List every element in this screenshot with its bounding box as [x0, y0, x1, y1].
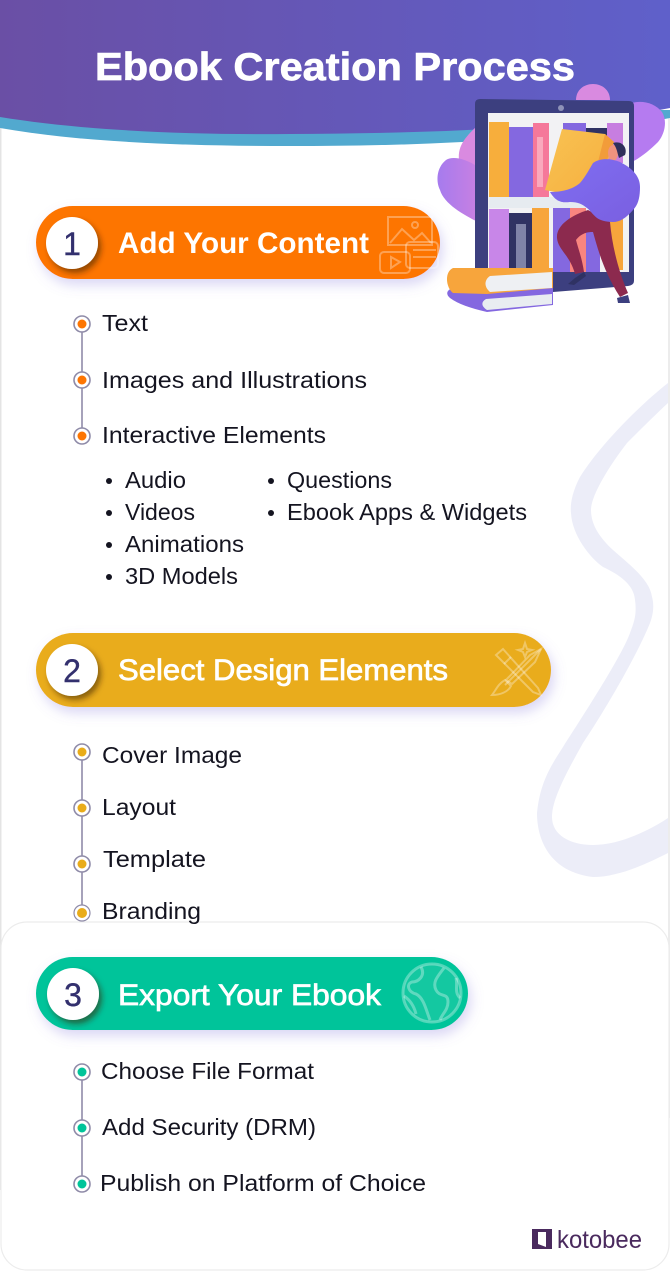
- heading: export your ebook: Export Your Ebook: [118, 979, 382, 1012]
- shelf books: [489, 122, 623, 272]
- sub-list: interactive elements, column 2: Ebook Apps & Widgets: [287, 499, 527, 525]
- icon: media: [380, 217, 438, 273]
- logo: kotobee: kotobee: [557, 1226, 642, 1254]
- number badge 1: 1: [63, 226, 81, 262]
- section 2 banner: [36, 633, 551, 707]
- person: [550, 142, 640, 303]
- heading: select design elements: Select Design Elements: [118, 654, 448, 687]
- tablet: [475, 99, 634, 292]
- item: interactive elements: Interactive Elements: [102, 422, 326, 448]
- item: add security: Add Security (DRM): [102, 1114, 316, 1140]
- icon: pencil and brush: [492, 643, 541, 695]
- item: text: Text: [102, 310, 149, 336]
- number badge 1: [46, 217, 98, 269]
- sub-list: interactive elements, column 1: 3D Models: [125, 563, 238, 589]
- heading: add your content: Add Your Content: [118, 227, 369, 260]
- item: branding: Branding: [102, 898, 201, 924]
- number badge 2: [46, 644, 98, 696]
- item: template: Template: [103, 846, 206, 872]
- sub-list: interactive elements, column 1: Videos: [125, 499, 195, 525]
- background swirl: [537, 383, 668, 877]
- section 1 banner: [36, 206, 440, 279]
- sub-list: interactive elements, column 2: Questions: [287, 467, 392, 493]
- list: section 3 items: [74, 1058, 426, 1196]
- icon: globe: [403, 964, 461, 1022]
- sub-list: interactive elements, column 1: Audio: [125, 467, 186, 493]
- item: cover image: Cover Image: [102, 742, 242, 768]
- sub-list: interactive elements, column 1: Animations: [125, 531, 244, 557]
- item: layout: Layout: [102, 794, 177, 820]
- list: section 2 items: [74, 742, 242, 924]
- item: layout: [74, 794, 177, 820]
- number badge 2: 2: [63, 653, 81, 689]
- plants behind tablet: [438, 84, 665, 222]
- panel: section 3 card: [1, 922, 669, 1270]
- item: choose file format: Choose File Format: [101, 1058, 315, 1084]
- number badge 3: [47, 968, 99, 1020]
- item: text: [74, 310, 149, 336]
- held book: [545, 129, 614, 200]
- sub-list: interactive elements, column 2: [268, 467, 527, 525]
- header banner: [0, 0, 670, 146]
- title: Ebook Creation Process: [95, 46, 575, 89]
- item: publish on platform: Publish on Platform of Choice: [100, 1170, 426, 1196]
- sub-list: interactive elements, column 1: [106, 467, 244, 589]
- stacked books: [447, 268, 553, 312]
- section 3 banner: [36, 957, 468, 1030]
- list: section 1 items: [74, 310, 367, 448]
- item: images and illustrations: Images and Illustrations: [102, 367, 367, 393]
- illustration: tablet bookshelf with reader: [438, 84, 665, 312]
- number badge 3: 3: [64, 977, 82, 1013]
